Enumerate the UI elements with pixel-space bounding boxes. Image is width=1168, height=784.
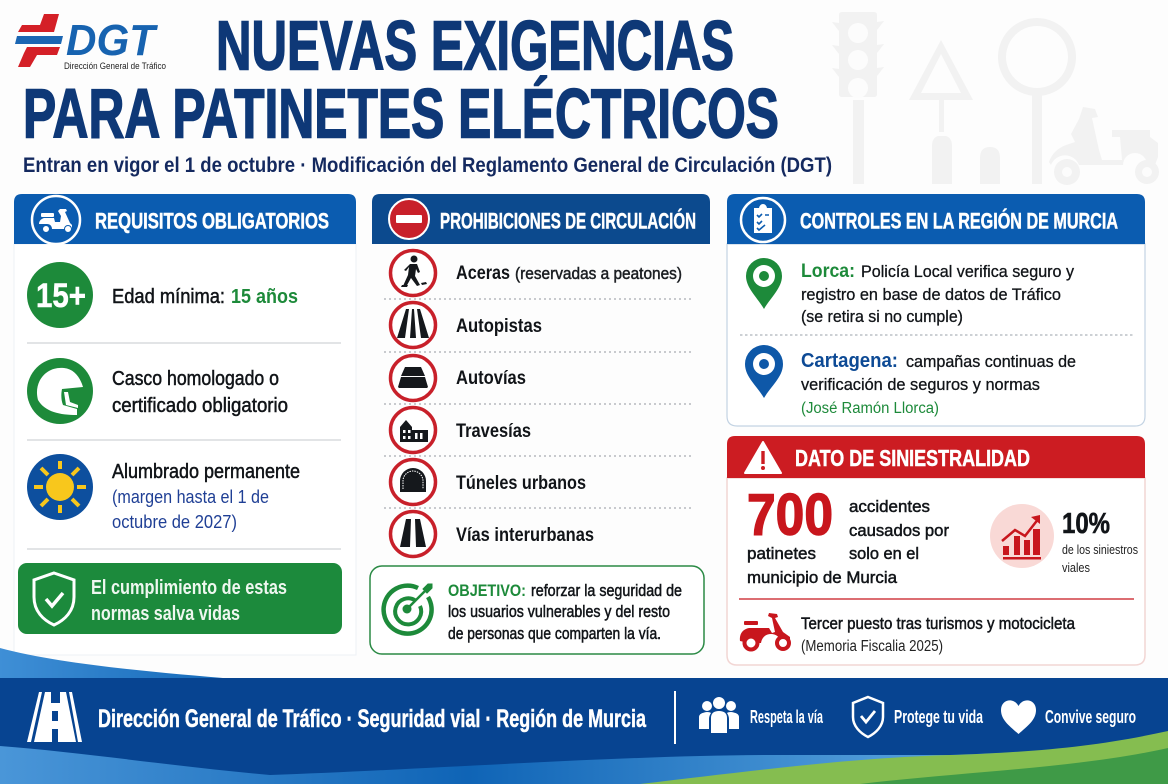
text: tercer puesto: Tercer puesto tras turismos y motocicleta: [801, 614, 1075, 633]
text: vias interurbanas: Vías interurbanas: [456, 525, 594, 546]
text: alumbrado: Alumbrado permanente: [112, 461, 300, 483]
text: autopistas: Autopistas: [456, 316, 542, 337]
text: alumbrado: (margen hasta el 1 de: [112, 487, 269, 507]
text: objetivo: [448, 581, 682, 643]
text: accidentes: accidentes: [849, 497, 930, 516]
text: cartagena: [801, 350, 1076, 417]
text: accidentes: causados por: [849, 521, 949, 540]
footer band: [0, 678, 1168, 775]
footer waves: [0, 648, 1168, 784]
panel header: requisitos: [14, 194, 356, 244]
text: accidentes: municipio de Murcia: [747, 568, 898, 587]
title: PARA PATINETES ELÉCTRICOS: [23, 74, 779, 152]
icon: 15+: [27, 262, 93, 328]
callout: objetivo: [370, 566, 704, 654]
icon: vias interurbanas: [390, 512, 436, 556]
text: edad minima: Edad mínima:: [112, 286, 225, 308]
text: lorca: Policía Local verifica seguro y: [861, 262, 1074, 281]
callout: cumplimiento: [18, 563, 342, 634]
icon: tuneles: [390, 460, 436, 504]
text: lorca: registro en base de datos de Tráfico: [801, 285, 1061, 304]
footer text: Dirección General de Tráfico · Seguridad vial · Región de Murcia: [98, 705, 647, 733]
icon: no entry: [389, 199, 429, 239]
icon: rising chart: [990, 504, 1054, 568]
title: NUEVAS EXIGENCIAS: [216, 6, 734, 84]
icon: clipboard: [741, 198, 785, 242]
text: tercer puesto: [801, 614, 1075, 655]
text: aceras: [456, 263, 682, 284]
text: accidentes: [747, 497, 949, 587]
stat: 700: 700: [747, 482, 833, 548]
text: alumbrado: [112, 461, 300, 532]
panel header: prohibiciones: [372, 194, 710, 244]
text: accidentes: patinetes: [747, 544, 816, 563]
icon: travesias: [390, 408, 436, 452]
text: cumplimiento: [91, 577, 287, 625]
icon: road: [27, 692, 82, 742]
text: casco: [112, 368, 288, 417]
subtitle: Entran en vigor el 1 de octubre · Modificación del Reglamento General de Circulación (DGT): [23, 154, 832, 177]
text: edad minima: 15 años: [231, 286, 298, 308]
icon: 15+: 15+: [36, 277, 86, 315]
heading: requisitos: REQUISITOS OBLIGATORIOS: [95, 208, 329, 234]
stat: 10%: [1062, 508, 1138, 575]
text: lorca: Lorca:: [801, 261, 855, 282]
text: cartagena: (José Ramón Llorca): [801, 400, 939, 417]
panel: dato de siniestralidad: [727, 436, 1145, 665]
icon: no pedestrians: [390, 250, 436, 296]
panel: requisitos obligatorios: [14, 194, 356, 655]
icon: heart: [1001, 700, 1036, 734]
icon: scooter in circle: [32, 196, 80, 244]
text: accidentes: solo en el: [849, 544, 919, 563]
icon: green pin: [746, 258, 782, 309]
panel: prohibiciones: [370, 194, 710, 654]
icon: blue pin: [745, 345, 783, 398]
text: aceras: (reservadas a peatones): [515, 264, 682, 283]
text: objetivo: de personas que comparten la vía.: [448, 625, 661, 643]
icon: shield: [34, 573, 74, 625]
icon: people: [699, 697, 739, 733]
text: travesias: Travesías: [456, 421, 531, 442]
panel header: controles: [727, 194, 1145, 244]
heading: prohibiciones: PROHIBICIONES DE CIRCULACIÓN: [440, 208, 696, 234]
background road sign silhouettes: [832, 12, 1159, 185]
text: edad minima: [112, 286, 298, 308]
stat: 10%: de los siniestros: [1062, 543, 1138, 557]
text: objetivo: OBJETIVO:: [448, 581, 526, 600]
heading: siniestralidad: DATO DE SINIESTRALIDAD: [795, 445, 1030, 471]
text: lorca: [801, 261, 1074, 326]
panel: controles en la region de murcia: [727, 194, 1145, 426]
text: cumplimiento: normas salva vidas: [91, 603, 240, 625]
text: cartagena: verificación de seguros y normas: [801, 375, 1040, 394]
text: cumplimiento: El cumplimiento de estas: [91, 577, 287, 599]
text: objetivo: reforzar la seguridad de: [531, 582, 682, 600]
text: casco: Casco homologado o: [112, 368, 279, 390]
DGT logo: DGT: [66, 16, 158, 65]
icon: footer shield: [853, 697, 883, 737]
text: cartagena: campañas continuas de: [906, 352, 1076, 371]
text: protege: Protege tu vida: [894, 707, 984, 727]
icon: red scooter: [740, 613, 790, 650]
icon: autopistas: [390, 302, 436, 348]
DGT logo: [15, 14, 166, 71]
icon: sun: [27, 454, 93, 520]
text: lorca: (se retira si no cumple): [801, 308, 963, 326]
text: objetivo: los usuarios vulnerables y del resto: [448, 603, 670, 621]
stat: 10%: 10%: [1062, 508, 1110, 540]
icon: autovias: [390, 356, 436, 400]
text: alumbrado: octubre de 2027): [112, 512, 237, 532]
text: aceras: Aceras: [456, 263, 510, 284]
text: tercer puesto: (Memoria Fiscalia 2025): [801, 638, 943, 655]
stat: 10%: viales: [1062, 561, 1090, 575]
icon: warning: [745, 442, 781, 473]
text: tuneles: Túneles urbanos: [456, 473, 586, 494]
title: [23, 6, 779, 152]
text: casco: certificado obligatorio: [112, 395, 288, 417]
icon: target: [384, 584, 432, 634]
icon: helmet: [27, 358, 93, 424]
text: cartagena: Cartagena:: [801, 350, 898, 372]
DGT logo: Dirección General de Tráfico: [64, 61, 166, 71]
text: respeta: Respeta la vía: [750, 707, 824, 727]
text: autovias: Autovías: [456, 368, 526, 389]
panel header: siniestralidad: [727, 436, 1145, 478]
